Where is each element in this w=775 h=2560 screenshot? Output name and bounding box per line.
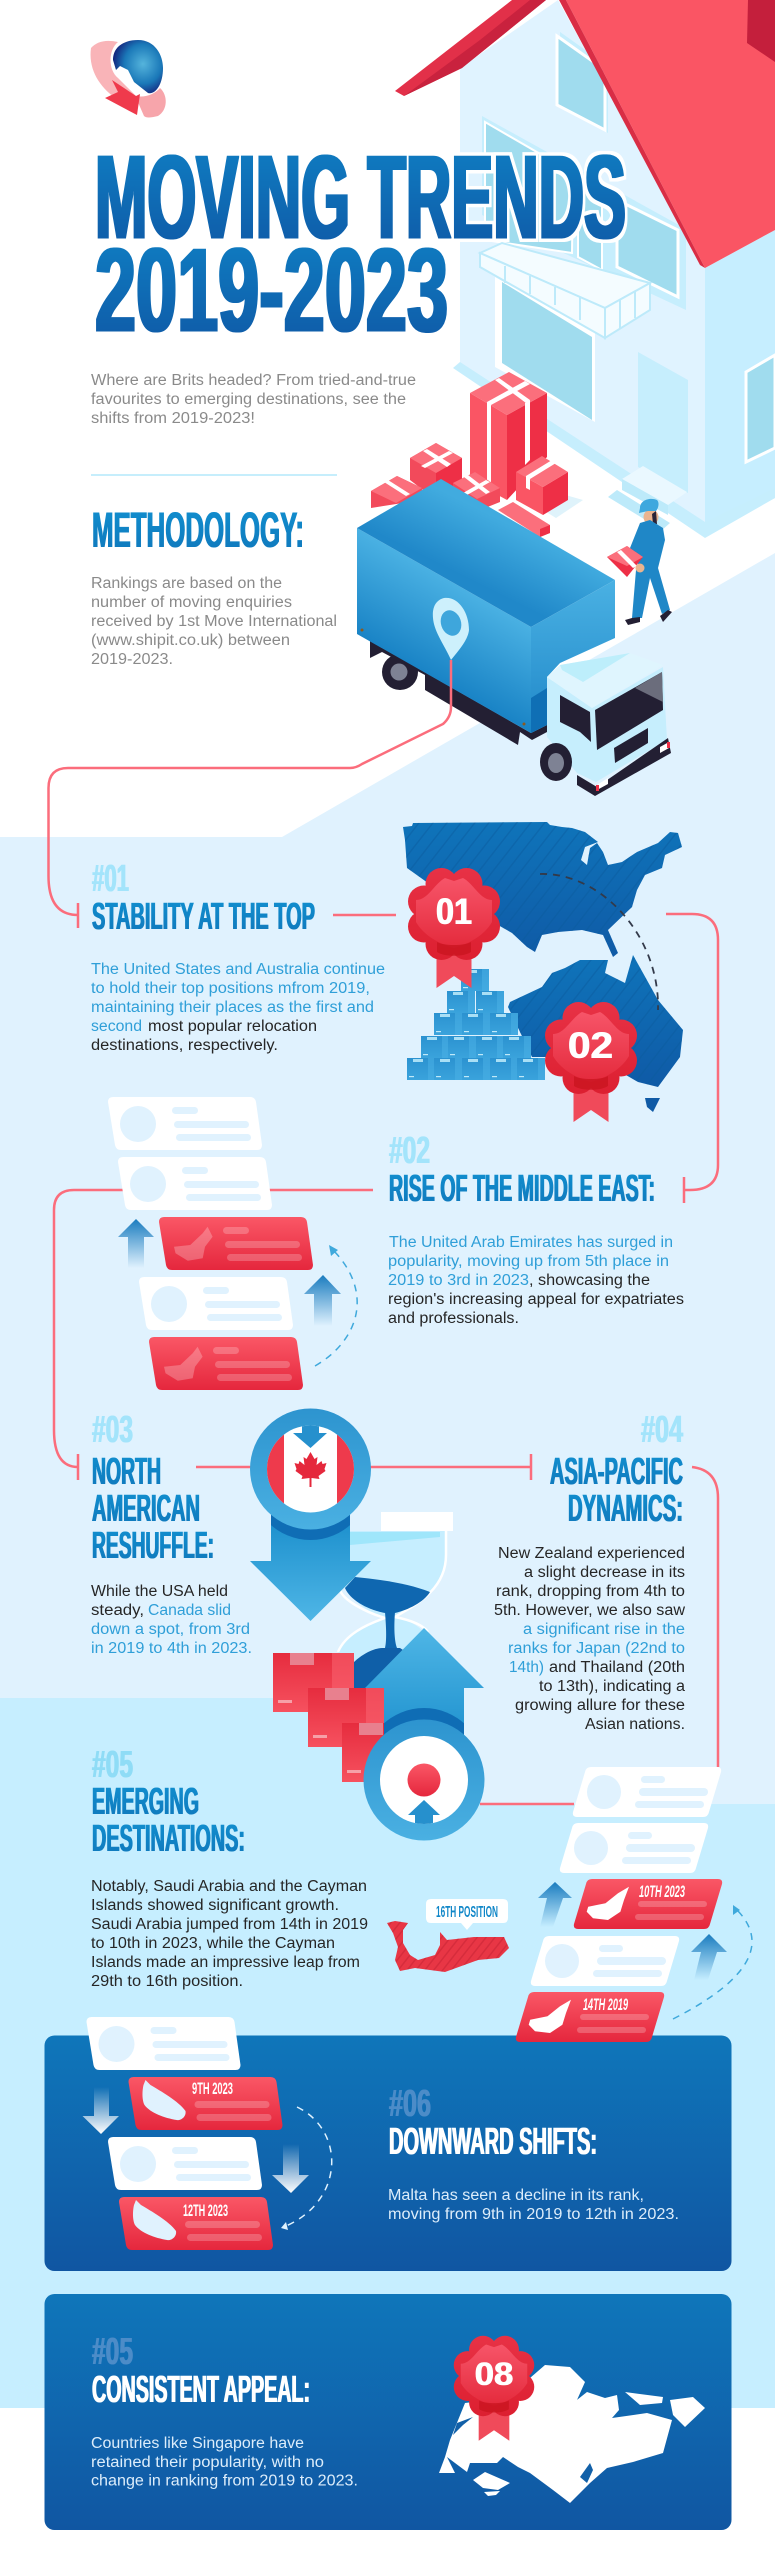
intro text: shifts from 2019-2023! — [91, 410, 255, 427]
section 02 text: The United Arab Emirates has surged in — [389, 1234, 673, 1251]
heading: methodology: METHODOLOGY: — [92, 502, 304, 558]
white card third — [531, 1936, 679, 1986]
red card 10th: 10TH 2023 — [639, 1882, 685, 1901]
dashed arc arrow — [315, 1245, 357, 1366]
badge 08: 08 — [475, 2356, 513, 2392]
section 03 text — [91, 1583, 252, 1657]
methodology text: number of moving enquiries — [91, 594, 292, 611]
badge 01: 01 — [436, 891, 472, 932]
section 06 heading — [389, 2083, 597, 2163]
Japan circle — [364, 1720, 484, 1840]
section 01 text: maintaining their places as the first and — [91, 999, 374, 1016]
hourglass — [335, 1512, 453, 1700]
section 04 text: growing allure for these — [515, 1697, 685, 1714]
section 01 connector — [78, 903, 718, 1203]
logo — [91, 40, 166, 118]
section 07 text: change in ranking from 2019 to 2023. — [91, 2472, 358, 2490]
section 04 text: a significant rise in the — [523, 1621, 685, 1638]
section 02 text: popularity, moving up from 5th place in — [388, 1253, 669, 1270]
methodology text — [91, 575, 337, 668]
red card 12th: 12TH 2023 — [183, 2201, 228, 2220]
section 02 text: 2019 to 3rd in 2023 — [388, 1272, 529, 1289]
section 05 heading: EMERGING — [92, 1781, 199, 1823]
section 04 text: to 13th), indicating a — [539, 1678, 685, 1695]
panel: consistent appeal — [44, 2294, 732, 2530]
red card 14th: 14TH 2019 — [583, 1995, 628, 2014]
section 01 heading — [92, 858, 315, 938]
pyramid of boxes — [407, 969, 545, 1080]
section 02 text — [388, 1234, 684, 1327]
methodology text: received by 1st Move International — [91, 613, 337, 630]
section 04 text: New Zealand experienced — [498, 1545, 685, 1562]
section 02 text: , showcasing the — [529, 1272, 650, 1289]
section 05 heading: #05 — [92, 1744, 133, 1786]
map: United States — [403, 822, 682, 957]
illustration: delivery truck — [357, 479, 671, 796]
section 07 heading: #05 — [92, 2331, 133, 2373]
section 05 text: Notably, Saudi Arabia and the Cayman — [91, 1878, 367, 1895]
section 02 text: region's increasing appeal for expatriates — [388, 1291, 684, 1308]
route connector — [48, 660, 451, 915]
illustration: house — [395, 0, 775, 538]
badge 02 — [545, 1002, 637, 1122]
section 03 text: steady, — [91, 1602, 144, 1619]
section 03 heading: #03 — [92, 1409, 133, 1451]
rank cards: Saudi Arabia — [516, 1767, 752, 2042]
methodology text: 2019-2023. — [91, 651, 173, 668]
white card rank 4 — [139, 1277, 293, 1330]
section 07 text: Countries like Singapore have — [91, 2435, 304, 2452]
section 01 text — [91, 961, 385, 1054]
section 02 heading — [389, 1130, 655, 1210]
panel: downward shifts — [44, 2036, 732, 2271]
section 04 text: rank, dropping from 4th to — [496, 1583, 685, 1600]
section 03 heading: RESHUFFLE: — [92, 1525, 214, 1567]
section 02 text: and professionals. — [388, 1310, 519, 1327]
roof — [395, 0, 775, 268]
Japanese flag disc — [408, 1764, 440, 1796]
red card 9th — [128, 2077, 282, 2130]
white card rank 2 — [118, 1157, 272, 1210]
section 03 heading — [92, 1409, 214, 1567]
section 01 text: to hold their top positions mfrom 2019, — [91, 980, 370, 997]
stacked red boxes — [273, 1653, 402, 1782]
methodology text: Rankings are based on the — [91, 575, 282, 592]
arrow up left — [118, 1219, 154, 1268]
section 04 text: 5th. However, we also saw — [494, 1602, 686, 1619]
section 07 text — [91, 2435, 358, 2490]
red card 2023 — [159, 1217, 313, 1270]
section 04 text: Asian nations. — [585, 1716, 685, 1733]
section 01 text: destinations, respectively. — [91, 1037, 278, 1054]
dashed arc arrow — [281, 2107, 332, 2230]
maple leaf — [294, 1452, 326, 1487]
section 05 text: 29th to 16th position. — [91, 1973, 243, 1990]
section 01 heading: #01 — [92, 858, 129, 900]
section 03 text: Canada slid — [148, 1602, 231, 1619]
callout: 16th position — [426, 1899, 508, 1930]
arrow down — [82, 2087, 119, 2134]
red card 14th — [516, 1992, 664, 2042]
red card 10th — [574, 1879, 722, 1929]
title: 2019-2023 — [95, 224, 448, 357]
section 07 heading — [92, 2331, 310, 2411]
map: Australia — [508, 955, 683, 1112]
section 05 text: Saudi Arabia jumped from 14th in 2019 — [91, 1916, 368, 1933]
section 07 text: retained their popularity, with no — [91, 2454, 324, 2471]
section 03 heading: AMERICAN — [92, 1488, 200, 1530]
up arrow — [365, 1628, 484, 1735]
dashed flight route — [540, 874, 658, 1010]
section 04 text: a slight decrease in its — [524, 1564, 685, 1581]
section 05 heading — [92, 1744, 245, 1860]
intro text: Where are Brits headed? From tried-and-true — [91, 372, 416, 389]
arrow up — [538, 1882, 572, 1927]
badge 02: 02 — [568, 1025, 613, 1066]
section 01 text: most popular relocation — [148, 1018, 317, 1035]
Canadian flag — [267, 1426, 354, 1512]
arrow up right — [304, 1275, 341, 1326]
section 03 text: in 2019 to 4th in 2023. — [91, 1640, 252, 1657]
section 05 text: Islands showed significant growth. — [91, 1897, 339, 1914]
section 03 heading: NORTH — [92, 1451, 161, 1493]
red card 9th: 9TH 2023 — [192, 2079, 233, 2098]
Canada circle — [250, 1408, 371, 1530]
section 04 text — [494, 1545, 686, 1733]
section 06 heading: DOWNWARD SHIFTS: — [389, 2121, 597, 2163]
methodology text: (www.shipit.co.uk) between — [91, 632, 290, 649]
section 06 text: Malta has seen a decline in its rank, — [388, 2187, 644, 2204]
red card 12th — [119, 2197, 273, 2250]
white card second — [560, 1823, 708, 1873]
section 05 text: to 10th in 2023, while the Cayman — [91, 1935, 335, 1952]
section 06 text — [388, 2187, 679, 2223]
section 03/04 connectors — [196, 1454, 718, 1804]
section 05 text: Islands made an impressive leap from — [91, 1954, 360, 1971]
map: Cayman Islands — [387, 1921, 509, 1972]
illustration: parcels — [371, 372, 583, 537]
map: Singapore — [439, 2365, 705, 2503]
title — [95, 131, 626, 357]
white card top — [86, 2017, 240, 2070]
map pin — [433, 598, 469, 660]
section 04 text: ranks for Japan (22nd to — [508, 1640, 685, 1657]
white card rank 1 — [108, 1097, 262, 1150]
arrow up — [691, 1934, 727, 1980]
badge 08 — [454, 2336, 534, 2441]
intro text — [91, 372, 416, 427]
section 01 text: second — [91, 1018, 142, 1035]
section 05 heading: DESTINATIONS: — [92, 1818, 245, 1860]
section 03 text: down a spot, from 3rd — [91, 1621, 250, 1638]
section 02 heading: #02 — [389, 1130, 430, 1172]
section 04 text: and Thailand (20th — [549, 1659, 685, 1676]
section 07 heading: CONSISTENT APPEAL: — [92, 2369, 310, 2411]
divider — [91, 474, 337, 476]
illustration: worker carrying parcel — [607, 499, 672, 625]
intro text: favourites to emerging destinations, see the — [91, 391, 406, 408]
section 01 heading: STABILITY AT THE TOP — [92, 896, 315, 938]
section 03 text: While the USA held — [91, 1583, 228, 1600]
rank cards: UAE — [108, 1097, 357, 1390]
arrow down — [272, 2144, 309, 2193]
red card 2019 — [149, 1337, 303, 1390]
down arrow — [250, 1514, 371, 1621]
small up arrow — [408, 1800, 440, 1826]
section 04 heading — [550, 1409, 683, 1530]
section 01 text: The United States and Australia continue — [91, 961, 385, 978]
dashed arc arrow — [673, 1905, 752, 2019]
white card top — [573, 1767, 721, 1817]
section 06 heading: #06 — [389, 2083, 431, 2125]
section 04 text: 14th) — [509, 1659, 544, 1676]
white card middle — [108, 2137, 262, 2190]
section 06 text: moving from 9th in 2019 to 12th in 2023. — [388, 2206, 679, 2223]
callout: 16th position: 16TH POSITION — [436, 1904, 498, 1921]
section 04 heading: #04 — [641, 1409, 683, 1451]
section 05 text — [91, 1878, 368, 1990]
section 02 connector — [54, 1190, 373, 1480]
rank cards: Malta — [82, 2017, 332, 2250]
badge 01 — [408, 868, 500, 988]
